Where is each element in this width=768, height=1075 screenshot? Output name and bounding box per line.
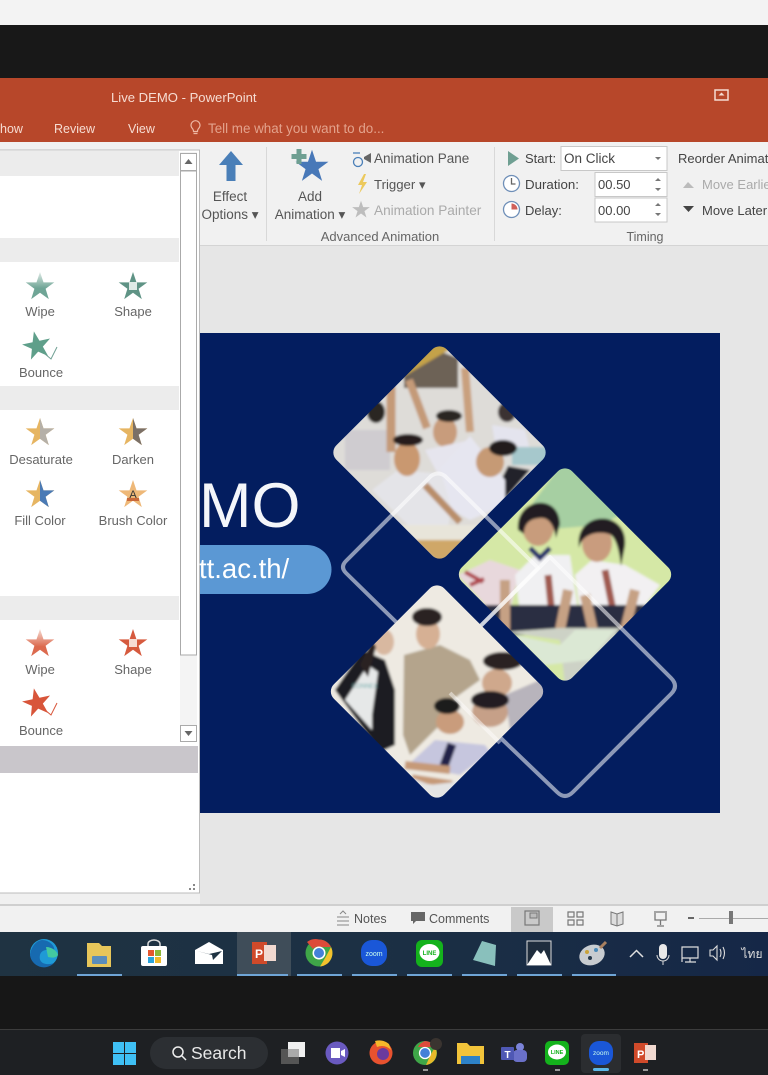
icon: delay clock [504, 202, 520, 218]
add animation label: Animation ▾ [275, 207, 346, 222]
star: shape emphasis [114, 629, 152, 677]
star: bounce emphasis [19, 685, 63, 738]
ribbon [200, 142, 768, 246]
search pill: Search [191, 1043, 246, 1063]
active zoom button: zoom [593, 1050, 609, 1057]
icon: resize grip [189, 884, 195, 890]
icon: slide show [654, 912, 667, 926]
running app underlines [77, 974, 616, 976]
URL pill [199, 545, 332, 594]
icon: chevron [630, 950, 643, 957]
star: brush color: Brush Color [99, 513, 168, 528]
star: desaturate: Desaturate [9, 452, 73, 467]
outline segment crossing teacher photo [450, 693, 500, 743]
URL pill: tt.ac.th/ [199, 553, 290, 584]
star: brush color [99, 480, 168, 528]
top browser strip [0, 0, 768, 25]
notes label: Notes [354, 912, 387, 926]
star: shape emphasis: Shape [114, 662, 152, 677]
duration label: Duration: [525, 177, 579, 192]
animation painter label: Animation Painter [374, 203, 482, 218]
icon: zoom [361, 940, 387, 966]
icon: comments [411, 912, 425, 924]
upper windows taskbar [0, 932, 768, 976]
delay field [595, 198, 667, 222]
icon: line [416, 940, 443, 967]
photo: students raising hands [333, 346, 546, 559]
start dropdown: On Click [564, 151, 615, 166]
icon: reading view [611, 912, 623, 926]
gallery scrollbar [180, 152, 197, 742]
icon: microsoft store [141, 940, 167, 966]
move later: Move Later [702, 203, 768, 218]
ribbon tabs: View [128, 122, 156, 136]
advanced animation group label: Advanced Animation [321, 229, 439, 244]
icon: chrome [306, 939, 332, 966]
panel: animation gallery [0, 142, 200, 904]
effect options label: Options ▾ [201, 207, 259, 222]
icon: network [682, 947, 698, 962]
icon: zoom: zoom [365, 951, 383, 958]
photo: teacher with students [330, 585, 544, 798]
start label: Start: [525, 151, 556, 166]
icon: task view [281, 1042, 305, 1064]
icon: add animation star [292, 149, 328, 181]
tell me search: Tell me what you want to do... [208, 121, 384, 136]
start dropdown [561, 146, 667, 170]
icon: powerpoint: P [637, 1049, 644, 1061]
star: bounce [19, 328, 63, 380]
icon: paint palette [576, 941, 608, 969]
icon: slide sorter [568, 912, 583, 925]
duration field: 00.50 [598, 177, 631, 192]
icon: animation painter [352, 201, 370, 218]
icon: file explorer [87, 943, 111, 967]
zoom slider [688, 911, 768, 924]
dark letterbox below window [0, 976, 768, 1029]
icon: animation pane [353, 153, 371, 166]
running app dots [423, 1069, 648, 1071]
language indicator: ไทย [741, 947, 762, 961]
PowerPoint title bar [0, 78, 768, 142]
slide [199, 333, 720, 813]
icon: line [545, 1041, 569, 1065]
icon: duration clock [504, 176, 520, 192]
icon: line: LINE [423, 951, 436, 957]
icon: folder [457, 1043, 484, 1064]
delay label: Delay: [525, 203, 562, 218]
icon: speaker [710, 946, 724, 960]
photo: girls reading on the floor [458, 468, 672, 681]
effect options label: Effect [213, 189, 247, 204]
icon: line: LINE [551, 1050, 564, 1056]
icon: trigger bolt [358, 174, 367, 194]
delay field: 00.00 [598, 203, 631, 218]
icon: glass app [473, 941, 496, 966]
animation pane label: Animation Pane [374, 151, 469, 166]
star: brush color: A [129, 489, 137, 501]
icon: meet [326, 1042, 348, 1064]
window title: Live DEMO - PowerPoint [111, 90, 257, 105]
icon: start play [508, 151, 519, 166]
icon: powerpoint: P [255, 947, 263, 961]
decorative rounded diamond outlines [343, 474, 675, 796]
add animation label: Add [298, 189, 322, 204]
ribbon tabs: how [0, 122, 24, 136]
star: shape [114, 272, 152, 319]
icon: powerpoint [252, 942, 276, 964]
ribbon tabs: Review [54, 122, 96, 136]
icon: chrome with avatar [413, 1038, 442, 1065]
status bar [0, 904, 768, 932]
trigger label: Trigger ▾ [374, 177, 426, 192]
star: wipe: Wipe [25, 304, 55, 319]
star: darken: Darken [112, 452, 154, 467]
star: fill color: Fill Color [14, 513, 66, 528]
star: wipe emphasis [25, 629, 55, 677]
photo: teacher with students: CONNEX [352, 684, 378, 690]
icon: powerpoint [634, 1043, 656, 1063]
star: shape: Shape [114, 304, 152, 319]
search pill [150, 1037, 268, 1069]
star: darken [112, 418, 154, 467]
workspace background [200, 246, 768, 906]
slide title fragment: MO [199, 471, 300, 541]
icon: teams [501, 1043, 527, 1062]
active zoom button [581, 1034, 621, 1073]
icon: effect options arrow [219, 151, 243, 181]
star: bounce emphasis: Bounce [19, 723, 63, 738]
icon: ribbon display options [715, 90, 728, 100]
normal view button [511, 907, 553, 932]
star: wipe [25, 272, 55, 319]
star: desaturate [9, 418, 73, 467]
lower windows 11 taskbar [0, 1029, 768, 1075]
star: bounce: Bounce [19, 365, 63, 380]
icon: photos [527, 941, 551, 965]
icon: teams: T [504, 1050, 511, 1061]
icon: edge [30, 939, 58, 967]
star: fill color [14, 480, 66, 528]
star: wipe emphasis: Wipe [25, 662, 55, 677]
icon: notes [337, 911, 349, 925]
icon: light bulb [191, 121, 200, 134]
timing group label: Timing [626, 230, 664, 244]
icon: microphone [657, 944, 669, 965]
dark letterbox above window [0, 25, 768, 78]
comments label: Comments [429, 912, 489, 926]
icon: windows start [113, 1042, 136, 1065]
icon: mail [195, 942, 223, 964]
duration field [595, 172, 667, 196]
icon: firefox [370, 1040, 392, 1064]
reorder animation heading: Reorder Animat [678, 151, 768, 166]
